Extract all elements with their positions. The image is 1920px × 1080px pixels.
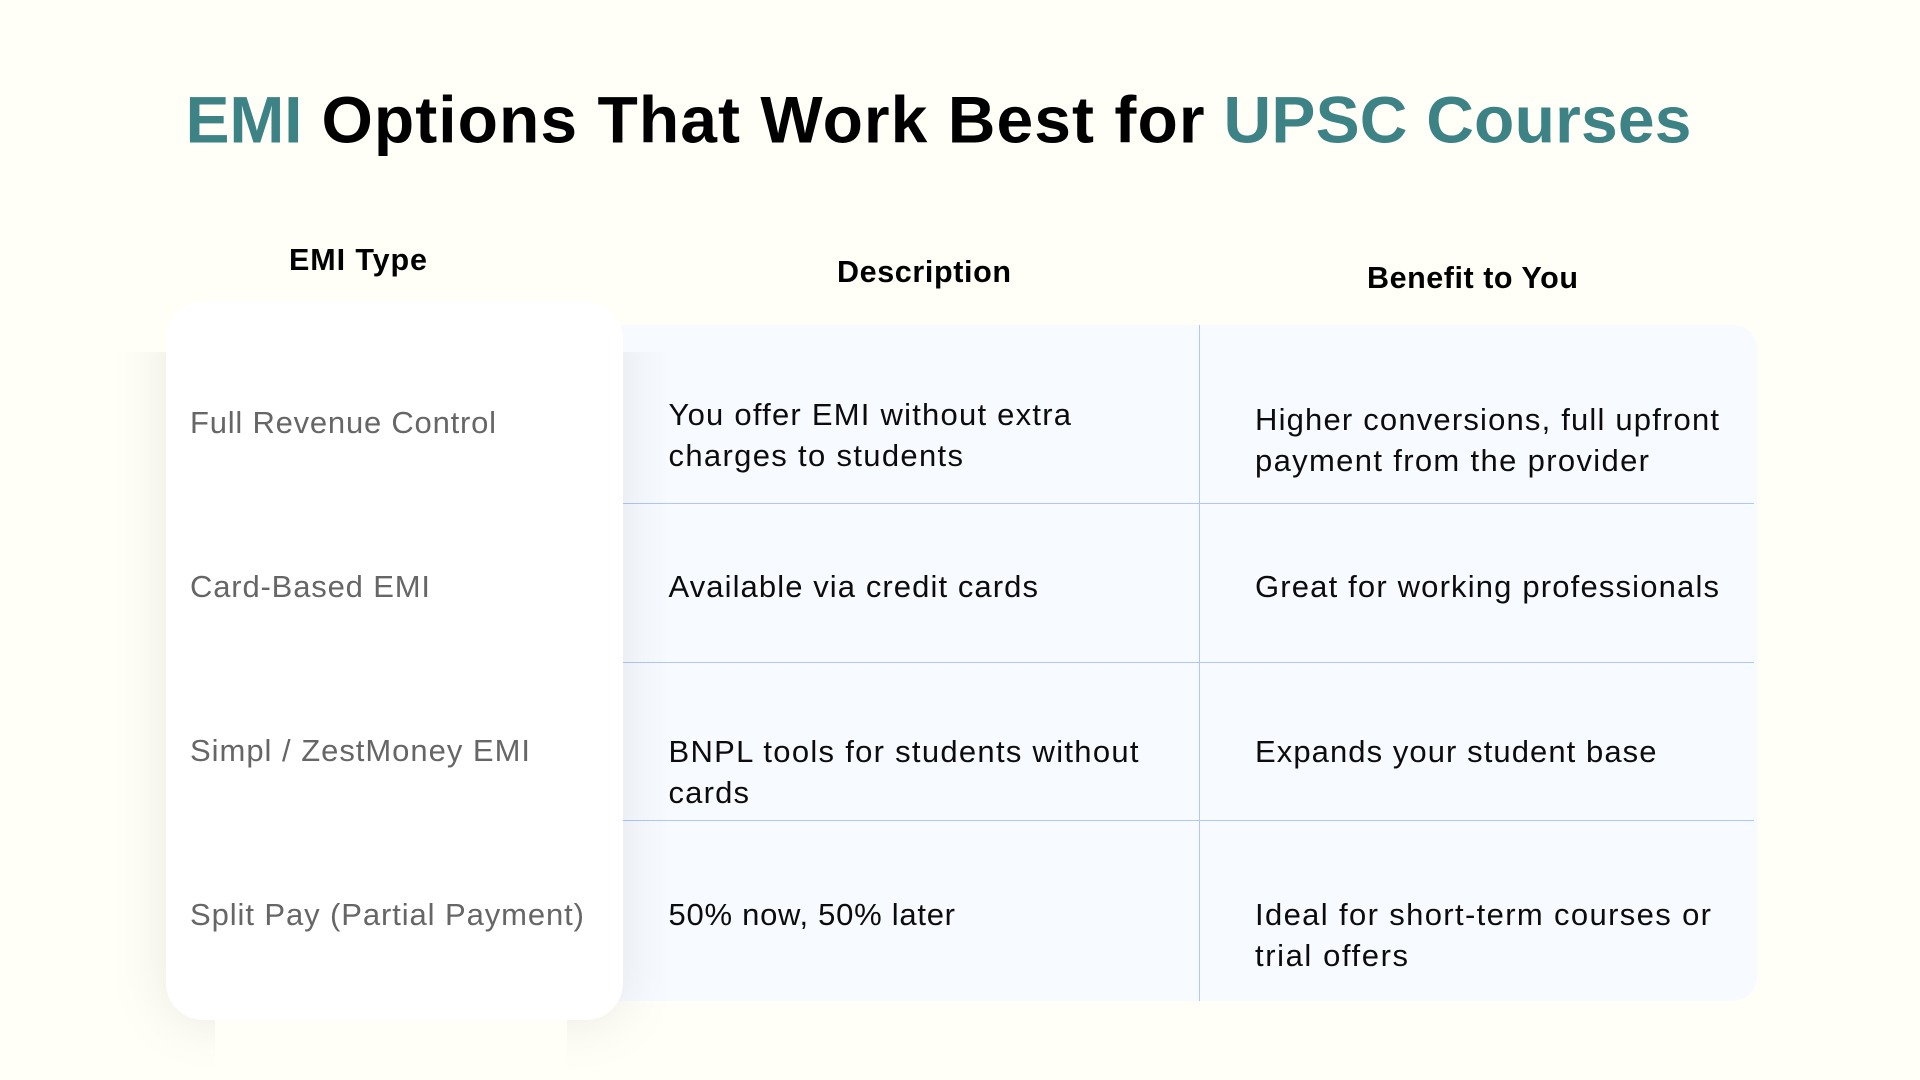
column heading: EMI Type: EMI Type — [289, 243, 427, 277]
row 3 description — [668, 734, 1139, 810]
row 1 description: charges to students — [668, 438, 963, 473]
row 4 benefit: trial offers — [1255, 938, 1408, 973]
infographic canvas — [158, 94, 1754, 1026]
column heading: Description: Description — [837, 255, 1011, 289]
panel: EMI type card — [166, 302, 623, 1020]
row 3 description: cards — [668, 775, 749, 810]
row label: Card-Based EMI: Card-Based EMI — [190, 569, 430, 604]
panel: description and benefit table background — [560, 325, 1757, 1001]
row 1 description — [668, 397, 1072, 473]
row 4 description: 50% now, 50% later — [668, 897, 955, 932]
title: Options That Work Best for — [322, 82, 1204, 156]
title: UPSC Courses — [1224, 82, 1692, 156]
row label: Full Revenue Control: Full Revenue Control — [190, 405, 496, 440]
row 1 benefit: payment from the provider — [1255, 443, 1649, 478]
title — [186, 82, 1692, 156]
row 1 benefit — [1255, 402, 1719, 478]
row 4 benefit: Ideal for short-term courses or — [1255, 897, 1711, 932]
row label: Split Pay (Partial Payment): Split Pay (Partial Payment) — [190, 897, 584, 932]
column heading: Benefit to You: Benefit to You — [1367, 261, 1578, 295]
row 2 description: Available via credit cards — [668, 569, 1038, 604]
row 2 benefit: Great for working professionals — [1255, 569, 1719, 604]
card shadow — [166, 302, 623, 1020]
row 3 benefit: Expands your student base — [1255, 734, 1656, 769]
row 1 benefit: Higher conversions, full upfront — [1255, 402, 1719, 437]
title: EMI — [186, 82, 302, 156]
row label: Simpl / ZestMoney EMI: Simpl / ZestMoney EMI — [190, 733, 530, 768]
row 4 benefit — [1255, 897, 1711, 973]
row 1 description: You offer EMI without extra — [668, 397, 1072, 432]
row 3 description: BNPL tools for students without — [668, 734, 1139, 769]
